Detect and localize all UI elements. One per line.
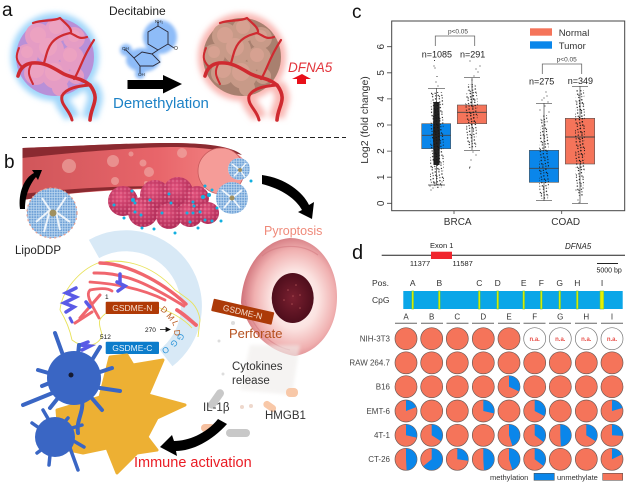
gene map: Exon 1 bbox=[430, 241, 453, 250]
label GSDME-N: GSDME-N bbox=[112, 303, 152, 313]
text: Decitabine: Decitabine bbox=[109, 4, 166, 18]
CpG site positions: B bbox=[436, 278, 442, 288]
row: NIH-3T3: n.a. bbox=[581, 337, 592, 343]
text: Pyroptosis: Pyroptosis bbox=[264, 224, 322, 238]
CpG site positions: F bbox=[539, 278, 544, 288]
icon: decitabine molecule bbox=[120, 19, 178, 79]
label GSDME-C: GSDME-C bbox=[112, 343, 152, 353]
text: Demethylation: Demethylation bbox=[113, 95, 209, 112]
column headers: H bbox=[583, 312, 589, 322]
row: EMT-6: EMT-6 bbox=[366, 407, 391, 416]
CpG site positions: I bbox=[601, 278, 603, 288]
text: Immune activation: Immune activation bbox=[134, 455, 252, 471]
CpG bar bbox=[372, 291, 623, 309]
text: LipoDDP: LipoDDP bbox=[15, 245, 61, 257]
panel b: pyroptosis mechanism bbox=[4, 143, 337, 473]
y axis: 4 bbox=[376, 96, 387, 102]
arrow: immune activation bbox=[160, 419, 227, 456]
panel d: methylation analysis bbox=[349, 241, 625, 482]
row: RAW 264.7 bbox=[349, 352, 623, 374]
sample size labels: n=275 bbox=[529, 77, 554, 87]
icon: up arrow bbox=[292, 74, 311, 84]
column headers: G bbox=[557, 312, 563, 322]
panel label d: d bbox=[352, 242, 363, 264]
CpG site positions: H bbox=[574, 278, 580, 288]
column headers: D bbox=[480, 312, 486, 322]
sample size labels: n=291 bbox=[460, 50, 485, 60]
blue immune cell large bbox=[23, 333, 120, 433]
panel label b: b bbox=[4, 152, 15, 173]
light blue arc bbox=[94, 241, 191, 358]
row: RAW 264.7: RAW 264.7 bbox=[349, 358, 391, 368]
CpG site positions: E bbox=[521, 278, 527, 288]
x axis: BRCA bbox=[444, 217, 472, 228]
row: CT-26 bbox=[368, 448, 623, 470]
column headers: E bbox=[506, 312, 512, 322]
column headers: C bbox=[454, 312, 460, 322]
row: NIH-3T3 bbox=[360, 328, 623, 350]
arrow: demethylation bbox=[128, 75, 182, 94]
row: NIH-3T3: NIH-3T3 bbox=[360, 334, 391, 344]
panel c: box plot bbox=[352, 2, 625, 228]
y axis: 3 bbox=[376, 122, 387, 128]
chart frame bbox=[392, 21, 625, 211]
text: HMGB1: HMGB1 bbox=[265, 410, 306, 422]
legend: Normal bbox=[559, 28, 589, 39]
tumor with red halo bbox=[198, 13, 286, 120]
released drug dots bbox=[112, 180, 252, 234]
significance bracket BRCA: p<0.05 bbox=[448, 28, 468, 36]
y axis: 0 bbox=[376, 200, 387, 206]
arrow: uptake bbox=[20, 170, 42, 209]
legend bbox=[530, 28, 589, 52]
label 512: 512 bbox=[100, 334, 111, 341]
CpG site positions: A bbox=[410, 278, 416, 288]
y axis: Log2 (fold change) bbox=[359, 76, 371, 164]
row: NIH-3T3: n.a. bbox=[530, 337, 540, 343]
nanoparticles at vessel wall bbox=[216, 158, 250, 214]
sample size labels: n=349 bbox=[568, 76, 593, 86]
legend: Tumor bbox=[559, 41, 586, 52]
sample size labels bbox=[422, 50, 593, 87]
CpG site positions: C bbox=[476, 278, 482, 288]
y axis: 2 bbox=[376, 148, 387, 154]
y axis: 1 bbox=[376, 174, 387, 180]
text: GGO: GGO bbox=[160, 332, 187, 356]
row: EMT-6 bbox=[366, 400, 623, 422]
row: 4T-1: 4T-1 bbox=[374, 431, 391, 440]
row: B16: B16 bbox=[376, 382, 391, 392]
x axis: COAD bbox=[551, 217, 580, 228]
icon: decitabine molecule: NH₂ bbox=[155, 19, 163, 24]
yellow immune cell bbox=[57, 355, 185, 473]
label GSDME-N rotated bbox=[211, 299, 274, 325]
gene map: 5000 bp bbox=[596, 268, 622, 274]
column headers: B bbox=[429, 312, 434, 322]
y axis: 5 bbox=[376, 70, 387, 76]
significance bracket BRCA bbox=[435, 28, 475, 46]
text: DFNA5: DFNA5 bbox=[288, 60, 333, 75]
gene map: 11377 bbox=[410, 259, 430, 268]
gene map bbox=[382, 241, 625, 274]
purple helices bbox=[64, 274, 125, 350]
row: 4T-1 bbox=[374, 424, 623, 446]
GSDME protein structure bbox=[60, 261, 200, 350]
box: BRCA normal bbox=[457, 61, 487, 168]
dying tumor cell bbox=[241, 238, 337, 356]
sample size labels: n=1085 bbox=[422, 50, 452, 60]
text: IL-1β: IL-1β bbox=[203, 402, 230, 414]
panel label c: c bbox=[352, 2, 362, 23]
CpG bar: CpG bbox=[372, 295, 389, 305]
y axis: 6 bbox=[376, 43, 387, 49]
icon: decitabine molecule: OH bbox=[138, 72, 145, 77]
x axis bbox=[444, 211, 580, 228]
text: Cytokines release bbox=[232, 361, 283, 387]
row: NIH-3T3: n.a. bbox=[555, 337, 566, 343]
blood vessel bbox=[22, 143, 247, 200]
column headers bbox=[395, 312, 623, 323]
arrow: to pyroptosis bbox=[262, 175, 314, 219]
nanoparticle: LipoDDP bbox=[27, 188, 77, 238]
row: CT-26: CT-26 bbox=[368, 455, 391, 464]
tumor with blue halo bbox=[11, 13, 99, 120]
significance bracket COAD bbox=[542, 56, 582, 74]
row: NIH-3T3: n.a. bbox=[607, 337, 617, 343]
CpG site positions: D bbox=[495, 278, 501, 288]
blue immune cell small bbox=[32, 410, 84, 470]
label 270 with arrow bbox=[145, 327, 170, 334]
panel a: demethylation bbox=[2, 0, 333, 120]
column headers: I bbox=[611, 312, 613, 322]
text: Perforate: Perforate bbox=[229, 326, 282, 341]
red strands bbox=[75, 263, 196, 325]
released cytokine particles bbox=[201, 321, 300, 437]
legend bbox=[490, 473, 623, 482]
label GSDME-N rotated: GSDME-N bbox=[222, 303, 263, 321]
gene map: DFNA5 bbox=[565, 242, 592, 251]
icon: decitabine molecule: OH bbox=[122, 46, 129, 51]
column headers: A bbox=[403, 312, 409, 322]
gene map: 11587 bbox=[453, 259, 473, 268]
box: BRCA tumor bbox=[422, 60, 451, 190]
text: Cytokines release: release bbox=[232, 375, 270, 387]
yellow loops bbox=[60, 261, 200, 345]
box: COAD normal bbox=[565, 86, 595, 203]
y axis bbox=[359, 43, 392, 206]
text: DMLD: DMLD bbox=[159, 304, 183, 336]
icon: decitabine molecule: O bbox=[174, 46, 178, 52]
label 1: 1 bbox=[105, 294, 109, 301]
CpG site positions: Pos. bbox=[372, 278, 389, 288]
CpG site positions bbox=[372, 278, 603, 288]
legend: unmethylate bbox=[557, 473, 598, 482]
label 270 with arrow: 270 bbox=[145, 327, 156, 334]
legend: methylation bbox=[490, 473, 528, 482]
text: Cytokines release: Cytokines bbox=[232, 361, 283, 373]
box: COAD tumor bbox=[529, 92, 559, 201]
row: B16 bbox=[376, 376, 623, 398]
significance bracket COAD: p<0.05 bbox=[557, 56, 577, 64]
panel label a: a bbox=[2, 0, 13, 21]
divider bbox=[22, 136, 346, 138]
tumor cluster bbox=[108, 177, 219, 229]
column headers: F bbox=[532, 312, 537, 322]
label GSDME-C bbox=[106, 342, 159, 354]
CpG site positions: G bbox=[556, 278, 563, 288]
label GSDME-N bbox=[106, 302, 159, 314]
